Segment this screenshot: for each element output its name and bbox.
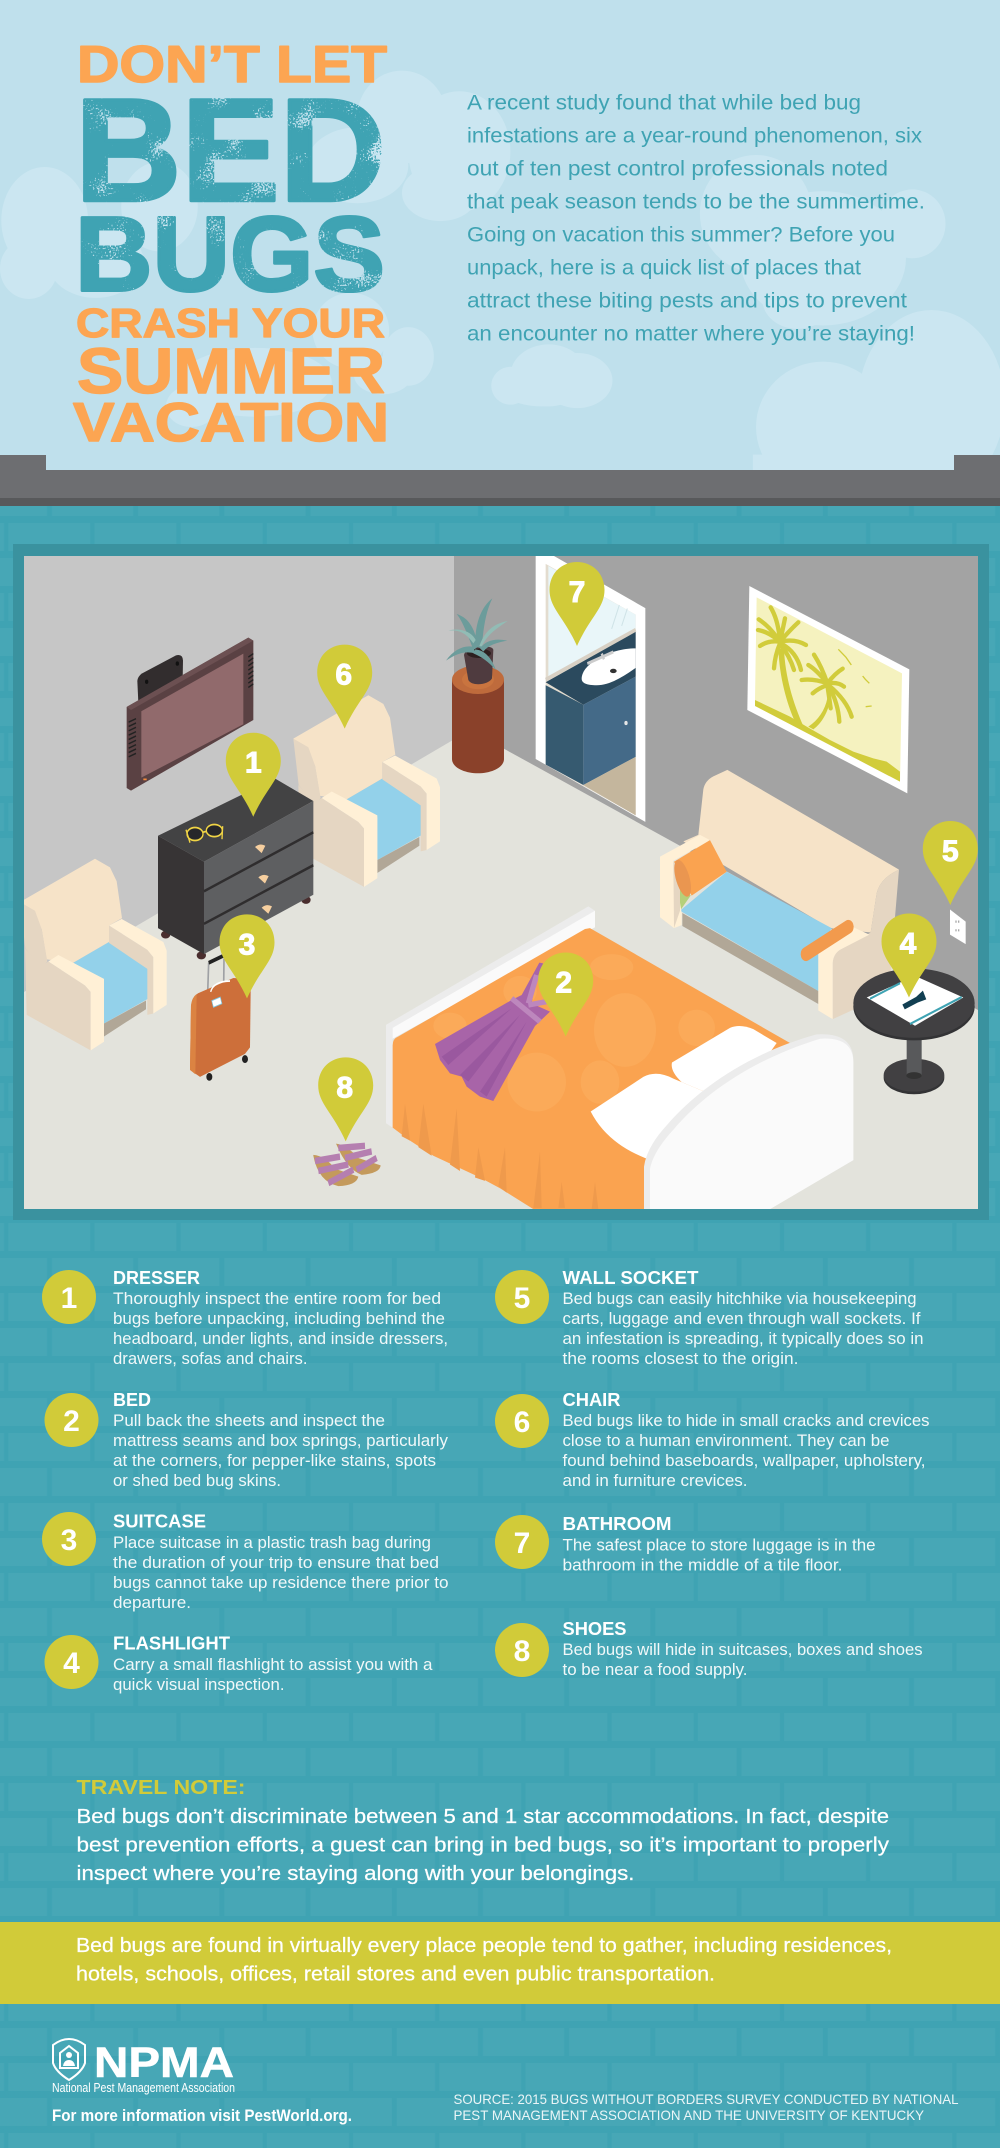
number badge 4: 4 <box>63 1647 80 1680</box>
item 6: chair <box>495 1390 930 1490</box>
body text: shoes: Bed bugs will hide in suitcases, boxes and shoes <box>562 1641 922 1659</box>
body text: wall socket: Bed bugs can easily hitchhike via housekeeping <box>562 1290 916 1308</box>
body text: flashlight: Carry a small flashlight to assist you with a <box>113 1656 433 1674</box>
map pin 6 <box>317 645 372 729</box>
bathroom floor <box>583 757 636 815</box>
map pin 2: 2 <box>555 966 572 1000</box>
bed duvet <box>393 928 790 1209</box>
suitcase <box>190 955 251 1081</box>
map pin 3 <box>220 914 274 998</box>
travel note body: inspect where you’re staying along with your belongings. <box>76 1862 634 1885</box>
body text: chair: found behind baseboards, wallpaper, upholstery, <box>562 1452 926 1470</box>
body text: shoes: to be near a food supply. <box>562 1661 748 1679</box>
chair behind pin 6 <box>293 695 440 887</box>
plant on pedestal <box>446 598 508 773</box>
title line: bugs: BUGS <box>75 196 385 314</box>
intro paragraph: unpack, here is a quick list of places that <box>467 256 861 280</box>
number badge 3: 3 <box>61 1524 77 1557</box>
number badge 1: 1 <box>61 1282 77 1315</box>
NPMA full name: National Pest Management Association <box>52 2081 235 2095</box>
body text: bed: Pull back the sheets and inspect the <box>113 1412 385 1430</box>
map pin 4: 4 <box>900 928 917 960</box>
travel note body: best prevention efforts, a guest can bring in bed bugs, so it’s important to properly <box>76 1834 890 1856</box>
title <box>73 36 389 453</box>
vanity right face <box>583 677 636 785</box>
TV screen <box>141 654 243 778</box>
body text: bed: or shed bed bug skins. <box>113 1472 281 1490</box>
roof ledge <box>0 455 1000 506</box>
body text: dresser: Thoroughly inspect the entire room for bed <box>113 1290 441 1308</box>
item 2: bed <box>44 1390 449 1490</box>
body text: bathroom: The safest place to store luggage is in the <box>562 1536 876 1554</box>
heading: suitcase: SUITCASE <box>113 1512 206 1532</box>
number badge 6 <box>495 1394 549 1448</box>
wall socket <box>950 909 966 944</box>
icon: NPMA shield <box>53 2039 85 2080</box>
panel: isometric hotel room illustration <box>20 556 978 1209</box>
item 8: shoes <box>495 1619 922 1679</box>
NPMA logo <box>52 2039 235 2095</box>
map pin 7 <box>550 562 604 646</box>
body text: bed: mattress seams and box springs, particularly <box>113 1432 449 1450</box>
source note: PEST MANAGEMENT ASSOCIATION AND THE UNIVERSITY OF KENTUCKY <box>454 2107 925 2123</box>
travel note <box>76 1777 890 1885</box>
number badge 5 <box>495 1270 549 1324</box>
placemat <box>867 976 963 1026</box>
body text: dresser: bugs before unpacking, including behind the <box>113 1310 445 1328</box>
brick wall background <box>0 506 1000 2148</box>
travel note heading: TRAVEL NOTE: <box>76 1777 246 1799</box>
number badge 8 <box>495 1623 549 1677</box>
heading: wall socket: WALL SOCKET <box>562 1268 698 1288</box>
pillows <box>672 1026 777 1104</box>
number badge 2: 2 <box>63 1405 80 1438</box>
title line: summer: SUMMER <box>77 335 385 407</box>
body text: shoes <box>562 1641 922 1679</box>
body text: bathroom <box>562 1536 876 1574</box>
intro paragraph: A recent study found that while bed bug <box>467 92 861 114</box>
item 3: suitcase <box>42 1512 448 1612</box>
sandals <box>313 1144 381 1186</box>
heading: chair: CHAIR <box>562 1390 620 1410</box>
body text: suitcase <box>113 1534 448 1612</box>
footboard <box>386 906 595 1128</box>
intro paragraph: an encounter no matter where you’re staying! <box>467 322 915 346</box>
title line: vacation: VACATION <box>73 391 389 453</box>
number badge 7: 7 <box>514 1527 530 1560</box>
duvet leaf pattern <box>433 954 715 1112</box>
body text: wall socket: the rooms closest to the origin. <box>562 1350 798 1368</box>
sofa seat <box>680 872 832 991</box>
left wall <box>24 556 454 1016</box>
mirror <box>548 566 636 677</box>
duvet folds <box>402 1104 598 1209</box>
dress <box>435 963 550 1101</box>
sofa left arm <box>660 835 710 928</box>
intro paragraph: out of ten pest control professionals noted <box>467 158 888 180</box>
yellow callout band <box>0 1922 1000 2004</box>
map pin 7: 7 <box>569 576 585 609</box>
number badge 8: 8 <box>514 1635 530 1668</box>
sofa <box>660 770 899 1019</box>
body text: wall socket: carts, luggage and even through wall sockets. If <box>562 1310 921 1328</box>
right wall <box>454 556 978 1036</box>
body text: chair: Bed bugs like to hide in small cracks and crevices <box>562 1412 930 1430</box>
item 7: bathroom <box>495 1514 876 1574</box>
heading: shoes: SHOES <box>562 1619 626 1639</box>
travel note body <box>76 1805 890 1885</box>
headboard <box>644 1034 853 1209</box>
title line: bed: BED <box>75 68 386 232</box>
body text: flashlight <box>113 1656 433 1694</box>
body text: bed <box>113 1412 449 1490</box>
body text: suitcase: bugs cannot take up residence there prior to <box>113 1574 448 1592</box>
sink <box>582 648 636 685</box>
number badge 3 <box>42 1512 96 1566</box>
heading: dresser: DRESSER <box>113 1268 200 1288</box>
sky background <box>0 0 1000 496</box>
map pin 6: 6 <box>335 659 352 692</box>
number badge 6: 6 <box>514 1406 530 1439</box>
travel note body: Bed bugs don’t discriminate between 5 and 1 star accommodations. In fact, despite <box>76 1805 889 1828</box>
source note <box>454 2091 959 2123</box>
body text: suitcase: the duration of your trip to ensure that bed <box>113 1554 439 1572</box>
map pin 2 <box>538 952 593 1036</box>
website link text: For more information visit PestWorld.org. <box>52 2107 352 2125</box>
title line: crash your: CRASH YOUR <box>76 300 385 346</box>
body text: wall socket <box>562 1290 924 1368</box>
heading: flashlight: FLASHLIGHT <box>113 1634 230 1654</box>
body text: dresser: drawers, sofas and chairs. <box>113 1350 308 1368</box>
intro paragraph <box>467 92 925 346</box>
item 4: flashlight <box>44 1634 433 1694</box>
pedestal <box>452 665 504 773</box>
wall TV <box>127 638 253 791</box>
intro paragraph: infestations are a year-round phenomenon, six <box>467 124 923 148</box>
number badge 5: 5 <box>514 1282 530 1315</box>
NPMA wordmark: NPMA <box>94 2039 234 2087</box>
item 1: dresser <box>42 1268 448 1368</box>
yellow callout band: hotels, schools, offices, retail stores and even public transportation. <box>76 1962 715 1986</box>
panel: hotel room frame <box>13 544 989 1220</box>
body text: chair: close to a human environment. They can be <box>562 1432 890 1450</box>
body text: dresser: headboard, under lights, and inside dressers, <box>113 1330 448 1348</box>
map pin 8: 8 <box>336 1071 353 1104</box>
body text: suitcase: departure. <box>113 1594 191 1612</box>
title line: don't let: DON’T LET <box>77 36 387 94</box>
dresser <box>158 779 313 959</box>
vanity left face <box>546 685 583 785</box>
map pin 3: 3 <box>239 928 255 961</box>
body text: bathroom: bathroom in the middle of a tile floor. <box>562 1556 842 1574</box>
number badge 7 <box>495 1515 549 1569</box>
TV wall mount <box>137 655 183 703</box>
potted plant <box>446 598 508 684</box>
left armchair <box>20 859 167 1050</box>
body text: dresser <box>113 1290 448 1368</box>
suitcase body <box>190 978 251 1077</box>
bed <box>386 906 853 1209</box>
intro paragraph: attract these biting pests and tips to prevent <box>467 290 907 312</box>
side table with flashlight <box>853 968 975 1094</box>
sunglasses <box>186 824 223 843</box>
clouds <box>0 71 1000 496</box>
sofa left bolster <box>674 840 727 896</box>
heading: bed: BED <box>113 1390 151 1410</box>
number badge 4 <box>44 1635 98 1689</box>
dresser knobs <box>255 844 272 914</box>
map pin 8 <box>318 1057 373 1141</box>
intro paragraph: that peak season tends to be the summertime. <box>467 190 925 214</box>
vanity top <box>546 632 636 705</box>
map pin 4 <box>882 914 936 998</box>
number badge 2 <box>44 1393 98 1447</box>
TV frame <box>127 638 253 791</box>
body text: bed: at the corners, for pepper-like stains, spots <box>113 1452 436 1470</box>
map pin 1 <box>226 733 281 817</box>
body text: chair <box>562 1412 930 1490</box>
map pin 5: 5 <box>942 835 959 868</box>
heading: bathroom: BATHROOM <box>562 1514 672 1534</box>
suitcase handle <box>208 958 224 993</box>
source note: SOURCE: 2015 BUGS WITHOUT BORDERS SURVEY CONDUCTED BY NATIONAL <box>454 2091 959 2107</box>
body text: chair: and in furniture crevices. <box>562 1472 748 1490</box>
body text: flashlight: quick visual inspection. <box>113 1676 284 1694</box>
body text: suitcase: Place suitcase in a plastic trash bag during <box>113 1534 431 1552</box>
yellow callout band: Bed bugs are found in virtually every place people tend to gather, including residences, <box>76 1934 892 1957</box>
floor <box>24 730 978 1209</box>
sofa right bolster <box>806 927 848 954</box>
item 5: wall socket <box>495 1268 924 1368</box>
flashlight <box>903 992 925 1008</box>
intro paragraph: Going on vacation this summer? Before you <box>467 224 895 246</box>
sofa right arm <box>818 927 869 1019</box>
map pin 1: 1 <box>245 747 262 780</box>
body text: wall socket: an infestation is spreading, it typically does so in <box>562 1330 924 1348</box>
map pin 5 <box>923 821 978 905</box>
wall art: palm tree picture <box>747 586 909 793</box>
bathroom doorway <box>536 556 645 822</box>
number badge 1 <box>42 1270 96 1324</box>
